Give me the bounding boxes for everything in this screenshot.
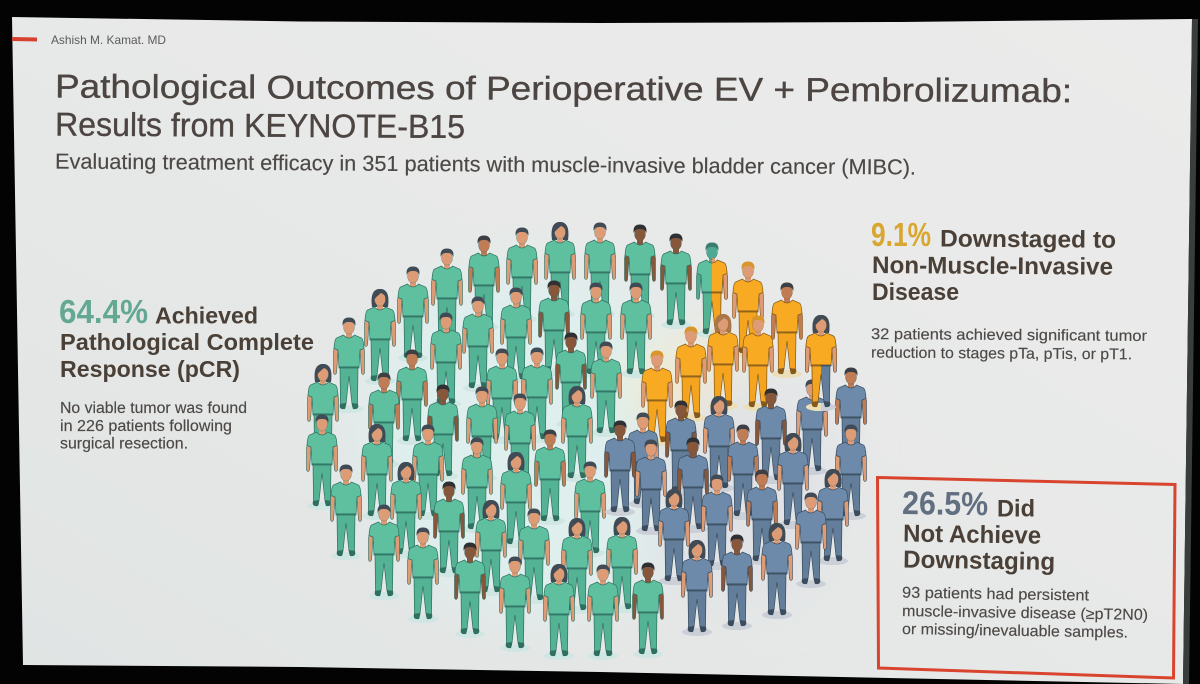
callout: 9.1% downstaged <box>871 216 1147 363</box>
body text: downstaged: 32 patients achieved significant tumor <box>871 326 1147 345</box>
callout box: 26.5% no downstaging <box>878 478 1175 678</box>
callout: 9.1% downstaged: Downstaged to <box>940 226 1116 254</box>
body text: downstaged <box>871 326 1147 363</box>
author name: Ashish M. Kamat. MD <box>51 33 166 47</box>
callout: 64.4% pathological complete response: Pathological Complete <box>60 329 314 355</box>
callout: 64.4% pathological complete response <box>59 293 314 452</box>
crowd background glow <box>360 270 840 610</box>
callout box: 26.5% no downstaging: Did <box>997 496 1035 522</box>
crowd: did not achieve downstaging (blue) <box>604 368 866 636</box>
callout box: 26.5% no downstaging: Not Achieve <box>903 521 1041 550</box>
person split green and orange <box>696 242 728 338</box>
body text: downstaged: reduction to stages pTa, pTis, or pT1. <box>871 345 1132 363</box>
body text: pCR <box>60 400 247 452</box>
projector edge <box>1183 19 1198 684</box>
title <box>55 68 1072 145</box>
callout: 9.1% downstaged: 9.1% <box>871 216 931 253</box>
person split orange and blue <box>806 315 836 411</box>
body text: no downstaging: 93 patients had persistent <box>902 585 1090 604</box>
body text: no downstaging: muscle-invasive disease (≥pT2N0) <box>902 603 1148 624</box>
body text: pCR: No viable tumor was found <box>60 400 247 417</box>
subtitle: Evaluating treatment efficacy in 351 patients with muscle-invasive bladder cancer (MIBC). <box>55 150 916 180</box>
crowd: downstaged to non-muscle-invasive disease (orange) <box>642 262 802 446</box>
title: Results from KEYNOTE-B15 <box>55 106 465 145</box>
crowd: pathological complete response (green) <box>306 222 692 660</box>
body text: no downstaging: or missing/inevaluable samples. <box>902 621 1128 642</box>
body text: pCR: surgical resection. <box>60 436 188 452</box>
body text: pCR: in 226 patients following <box>60 418 232 435</box>
callout: 9.1% downstaged: Disease <box>872 279 959 306</box>
body text: no downstaging <box>902 585 1148 642</box>
callout box: 26.5% no downstaging: 26.5% <box>902 484 988 522</box>
header accent bar <box>12 37 37 42</box>
title: Pathological Outcomes of Perioperative EV + Pembrolizumab: <box>55 68 1072 109</box>
callout: 64.4% pathological complete response: Achieved <box>155 302 258 328</box>
callout: 64.4% pathological complete response: 64.4% <box>59 293 148 330</box>
callout: 9.1% downstaged: Non-Muscle-Invasive <box>872 252 1113 281</box>
callout: 64.4% pathological complete response: Response (pCR) <box>60 356 240 382</box>
callout box: 26.5% no downstaging: Downstaging <box>903 547 1055 576</box>
